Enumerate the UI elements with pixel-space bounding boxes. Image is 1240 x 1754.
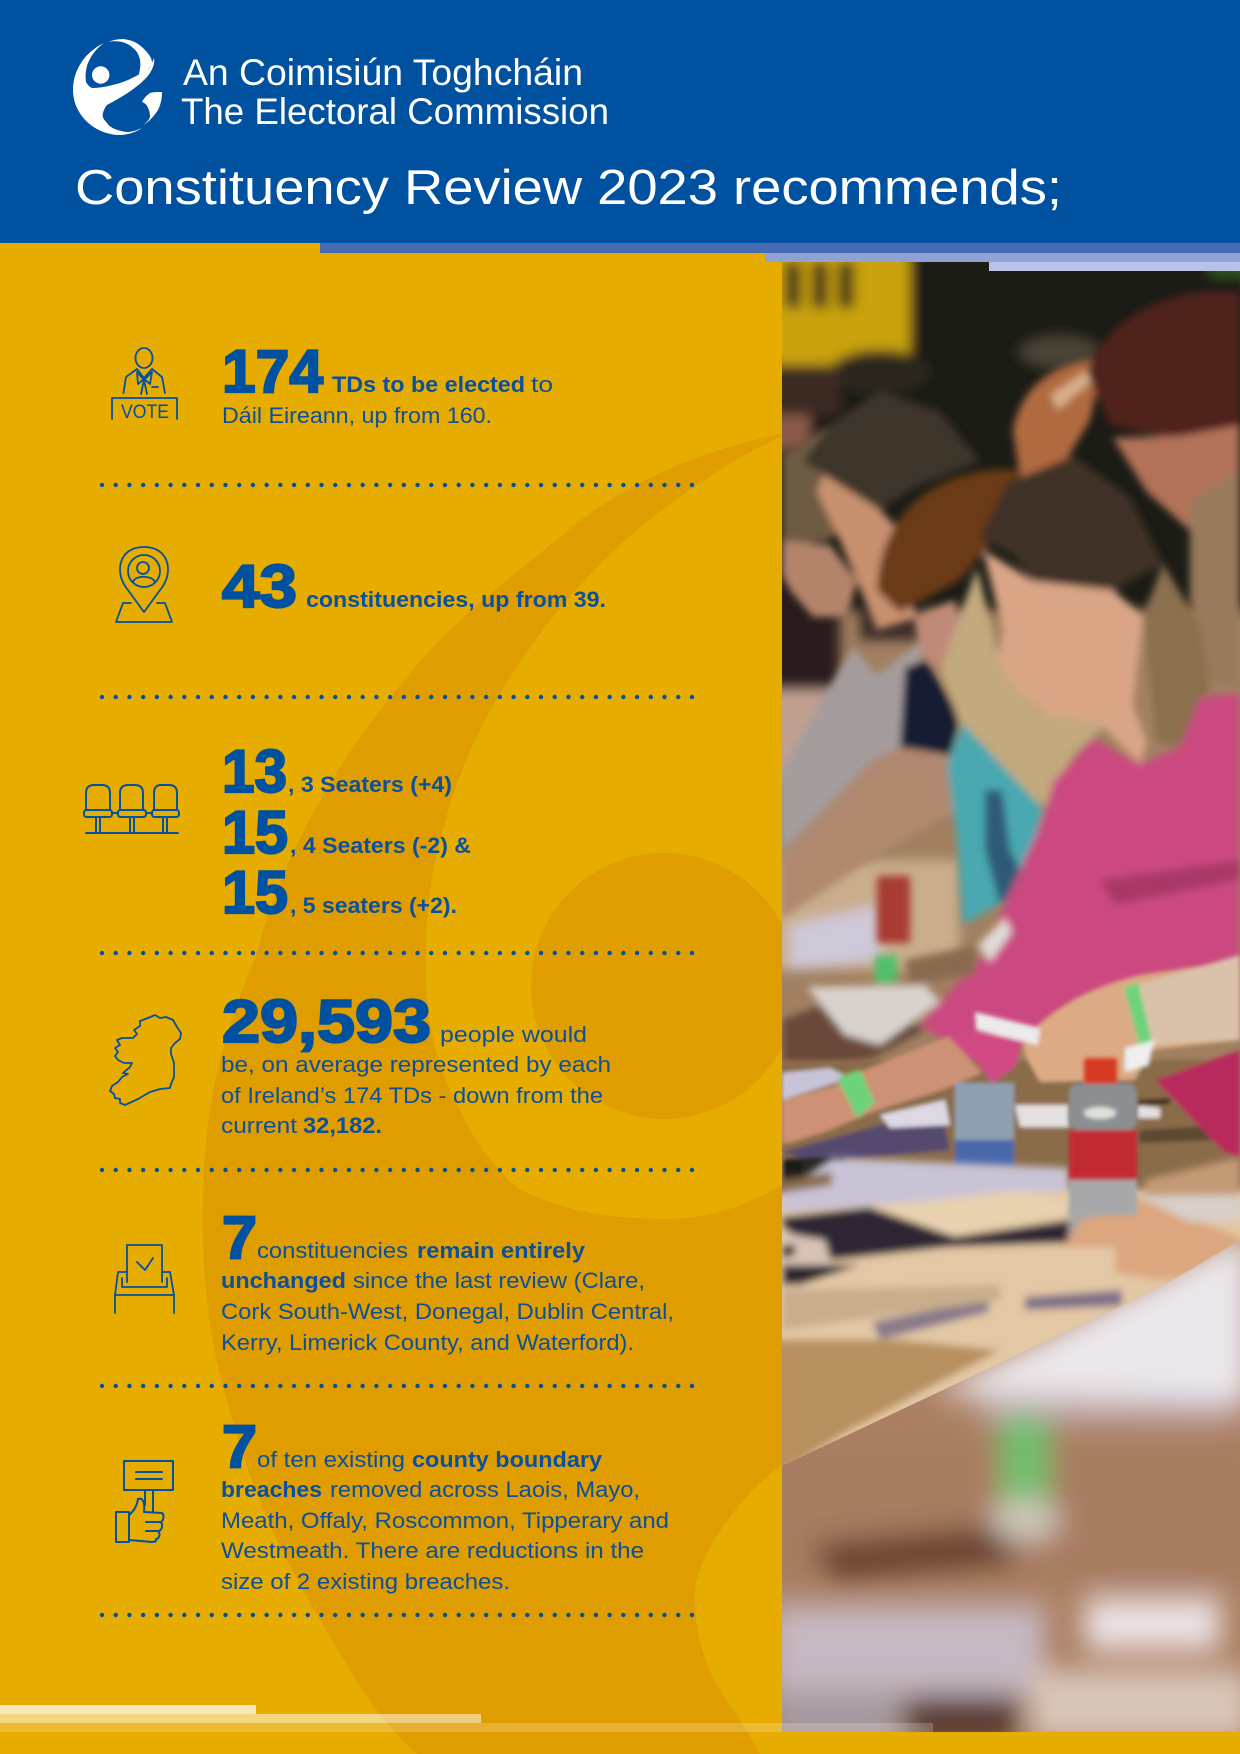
text [221, 1447, 669, 1594]
number: 7 [222, 1413, 257, 1480]
icon: ballot box [115, 1245, 174, 1313]
text: remain entirely [417, 1238, 586, 1263]
text: people would [440, 1022, 587, 1047]
number: 7 [222, 1204, 257, 1271]
text: Meath, Offaly, Roscommon, Tipperary and [221, 1508, 669, 1533]
icon: candidate at vote podium [112, 348, 177, 423]
text [221, 1022, 611, 1138]
text: 5 seaters: , 5 seaters (+2). [290, 893, 457, 918]
stat: 7 constituencies unchanged [115, 1204, 674, 1355]
text: breaches [221, 1477, 322, 1502]
photo bottle [1069, 1058, 1137, 1215]
stat: 29,593 people [110, 988, 611, 1138]
text: current [221, 1113, 298, 1138]
stat: seat breakdown [84, 738, 471, 926]
number: 43 [222, 553, 297, 620]
text: removed across Laois, Mayo, [330, 1477, 640, 1502]
icon: row of three seats [84, 785, 179, 833]
text: Kerry, Limerick County, and Waterford). [221, 1330, 634, 1355]
photo: election count table [770, 250, 1240, 1740]
text: constituencies, up from 39. [306, 587, 606, 612]
icon: map pin with person [116, 547, 172, 622]
icon: candidate at vote podium: VOTE [121, 402, 169, 423]
bottom accent bars [0, 1705, 933, 1732]
number: 29,593 [222, 988, 431, 1055]
number: 15 second: 15 [222, 859, 288, 926]
text: to [531, 372, 553, 397]
photo lower overlay [770, 1230, 1240, 1740]
stat: 43 constituencies [116, 547, 606, 622]
photo upper background [770, 250, 1240, 970]
photo people [780, 291, 1240, 1073]
logo text: English name: The Electoral Commission [181, 91, 609, 132]
number: 15: 15 [222, 799, 288, 866]
text: of ten existing [257, 1447, 405, 1472]
text: 3 seaters: , 3 Seaters (+4) [288, 772, 452, 797]
top accent bars [320, 243, 1240, 271]
text: unchanged [221, 1268, 346, 1293]
text: of Ireland’s 174 TDs - down from the [221, 1083, 603, 1108]
text: county boundary [412, 1447, 602, 1472]
text [221, 1238, 674, 1355]
number: 13: 13 [222, 738, 287, 805]
icon: thumbs-up holding sign [116, 1461, 173, 1542]
photo papers and hand [770, 1157, 1240, 1480]
panel: header band [0, 0, 1240, 243]
text: be, on average represented by each [221, 1052, 611, 1077]
title: Constituency Review 2023 recommends; [75, 161, 1062, 215]
text: Dáil Eireann, up from 160. [222, 403, 492, 428]
text: constituencies [257, 1238, 408, 1263]
icon: Electoral Commission logo [73, 39, 162, 135]
text: TDs to be elected [332, 372, 525, 397]
photo table and arms [782, 955, 1240, 1190]
text: 4 seaters: , 4 Seaters (-2) & [290, 833, 471, 858]
stat: 7 boundary breaches [116, 1413, 669, 1594]
stat: 174 TDs [112, 338, 553, 428]
text: Cork South-West, Donegal, Dublin Central, [221, 1299, 674, 1324]
text: Westmeath. There are reductions in the [221, 1538, 644, 1563]
text: size of 2 existing breaches. [221, 1569, 510, 1594]
icon: map of Ireland [110, 1015, 181, 1105]
text [222, 372, 553, 428]
number: 174 [222, 338, 324, 405]
logo text: Irish name: An Coimisiún Toghcháin [183, 52, 583, 93]
text: 32,182. [303, 1113, 382, 1138]
text: since the last review (Clare, [353, 1268, 645, 1293]
